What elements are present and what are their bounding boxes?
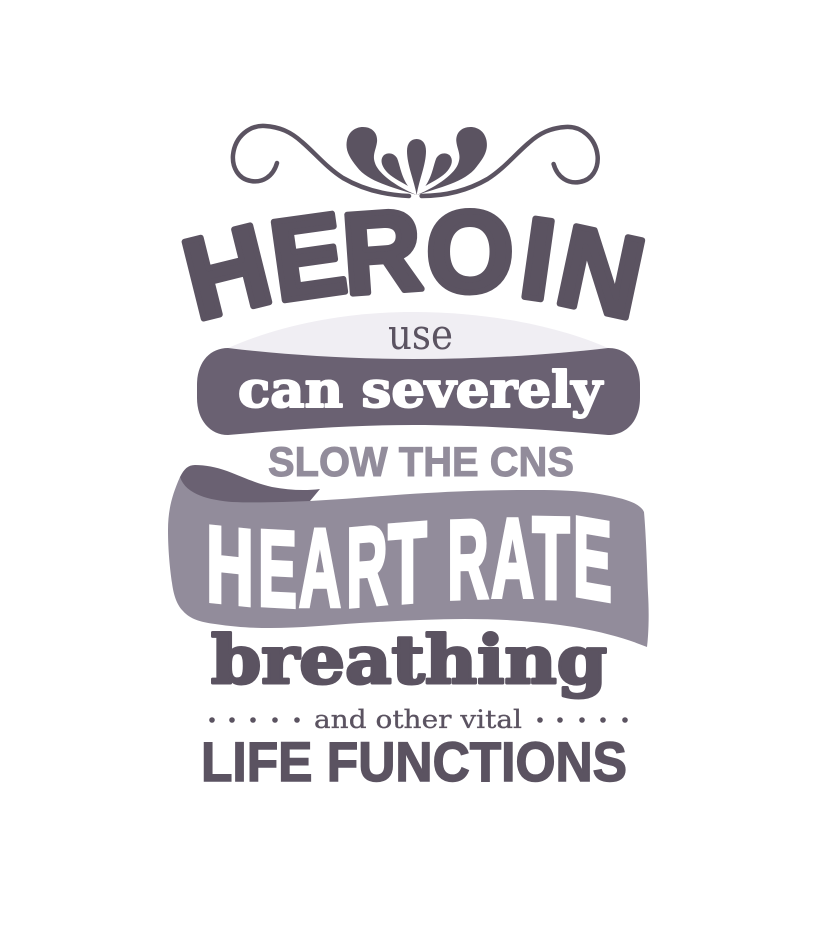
title: HEROIN: O (426, 188, 514, 317)
ribbon fold (180, 465, 320, 502)
title: HEROIN: E (263, 187, 353, 326)
title: HEROIN: I (513, 194, 563, 325)
title: HEROIN (171, 184, 655, 345)
pill shape (197, 348, 640, 435)
text: HEART RATE: T (532, 493, 570, 623)
dots left (209, 717, 300, 723)
light arc behind use (228, 312, 608, 359)
text: and other vital: and other vital (314, 705, 522, 734)
banner: can severely (197, 348, 640, 435)
left half of flourish (233, 126, 417, 196)
right drops of flourish (417, 127, 487, 195)
text: HEART RATE: E (573, 493, 612, 626)
text: breathing: breathing (211, 621, 607, 699)
ribbon: HEART RATE (168, 465, 649, 647)
text: HEART RATE: E (258, 509, 297, 631)
center drop (407, 139, 426, 195)
text: HEART RATE (206, 493, 612, 631)
text: HEART RATE: T (388, 499, 427, 628)
text: HEART RATE: H (206, 503, 254, 628)
text: HEART RATE: A (299, 506, 341, 630)
text: can severely: can severely (238, 360, 604, 419)
ribbon body (168, 477, 649, 647)
title: HEROIN: H (171, 200, 283, 345)
text: HEART RATE: R (447, 496, 489, 623)
text: HEART RATE: R (346, 501, 388, 631)
text: SLOW THE CNS: SLOW THE CNS (268, 438, 574, 485)
title: HEROIN: R (338, 184, 426, 319)
text: use: use (388, 310, 453, 359)
right swirl of flourish (422, 127, 598, 196)
title: HEROIN: N (547, 201, 655, 344)
ornament: flourish (233, 126, 598, 196)
dots right (537, 717, 628, 723)
text: HEART RATE: A (491, 496, 534, 621)
text: LIFE FUNCTIONS: LIFE FUNCTIONS (201, 730, 627, 793)
